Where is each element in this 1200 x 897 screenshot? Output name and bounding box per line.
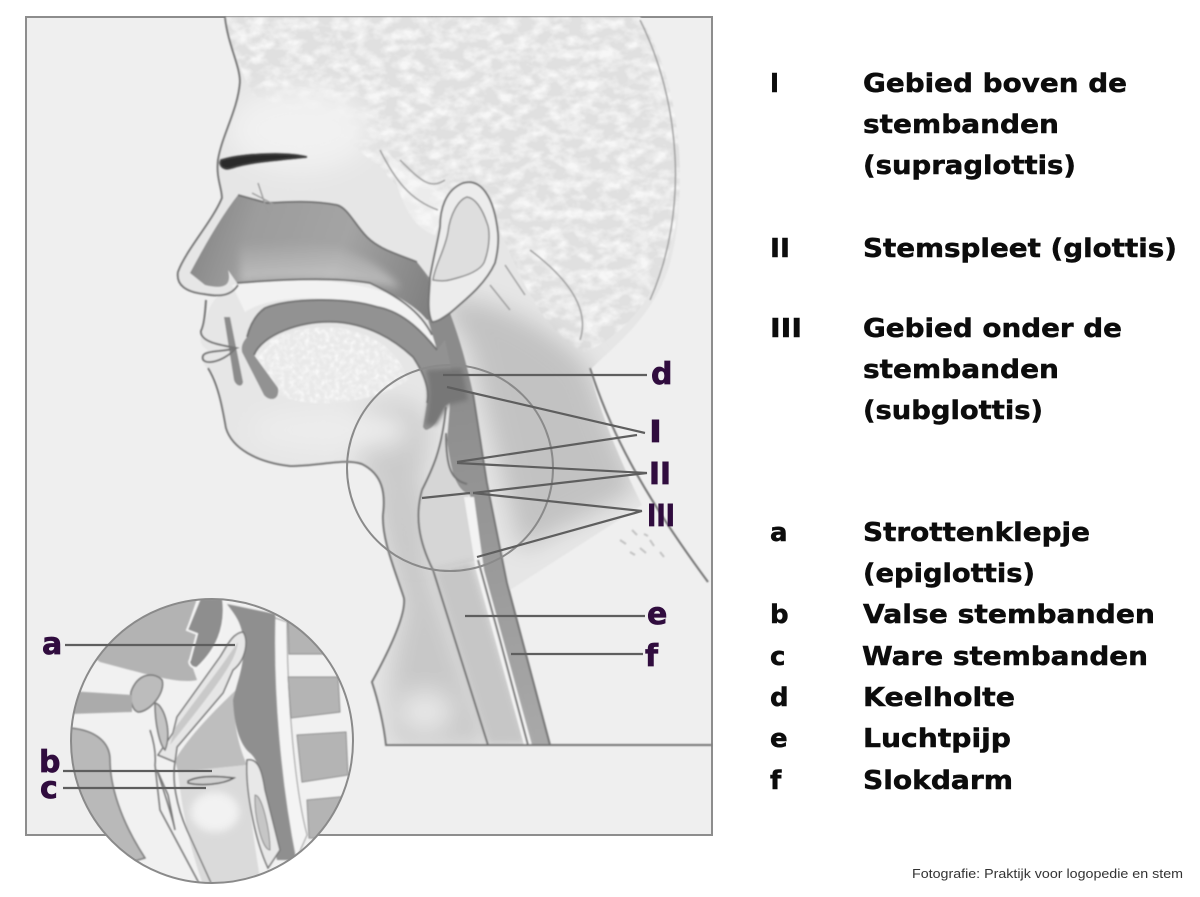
legend: [770, 69, 1177, 796]
jaw shading: [340, 408, 410, 456]
legend entry c: Ware stembanden: [862, 642, 1148, 672]
thyroid cartilage: [155, 703, 168, 750]
neck highlight: [397, 690, 453, 734]
airway highlight: [191, 792, 239, 832]
legend entry a: Strottenklepje: [863, 518, 1090, 548]
mandible speckled region: [254, 327, 408, 403]
epiglottis pocket: [187, 598, 224, 668]
inset background: [71, 599, 353, 883]
legend entry II: II: [770, 234, 790, 264]
false vocal fold: [188, 776, 234, 785]
face highlight: [243, 93, 368, 161]
legend entry b: [770, 600, 1155, 630]
leader a: [65, 644, 235, 646]
label f: f: [645, 639, 659, 674]
oral cavity and pharynx arch: [242, 300, 452, 429]
cricoid inner: [255, 795, 270, 850]
dark pharynx core: [425, 368, 468, 425]
strap muscle: [70, 691, 132, 714]
trachea: [433, 560, 528, 745]
legend entry b: b: [770, 600, 789, 630]
labels: main view: [645, 357, 675, 674]
hair: [225, 17, 680, 352]
legend entry I: stembanden: [863, 110, 1059, 140]
bottom left tissue: [72, 726, 147, 862]
airway walls: [237, 195, 550, 745]
label I: I: [649, 415, 662, 450]
leaders I: [447, 387, 645, 462]
legend entry II: Stemspleet (glottis): [863, 234, 1177, 264]
leader f: [511, 653, 643, 655]
neck shading: [383, 501, 484, 744]
anterior wall: [150, 730, 212, 885]
oral vertical bar: [224, 317, 243, 386]
hyoid: [131, 675, 163, 712]
label b: b: [39, 745, 60, 780]
illustration: head and neck cross-section: [178, 17, 712, 745]
soft palate band: [232, 280, 437, 350]
legend entry c: c: [770, 642, 785, 672]
legend entry a: [770, 518, 1090, 589]
legend entry a: (epiglottis): [863, 559, 1035, 589]
pharynx: [227, 604, 298, 860]
inset contents: [72, 600, 349, 882]
legend entry III: [770, 314, 1122, 426]
legend entry III: (subglottis): [863, 396, 1043, 426]
leader b: [63, 770, 212, 772]
legend entry III: stembanden: [863, 355, 1059, 385]
epiglottis: [158, 632, 246, 762]
label II: II: [649, 457, 671, 492]
legend entry a: a: [770, 518, 788, 548]
leader lines: main view: [422, 375, 647, 654]
leader c: [63, 787, 206, 789]
legend entry III: Gebied onder de: [863, 314, 1122, 344]
neck back: [590, 368, 708, 582]
inner ear: [433, 197, 489, 281]
back of neck shading: [440, 298, 636, 550]
inset border: [71, 599, 353, 883]
epiglottis core: [170, 642, 238, 745]
leader d: [443, 374, 647, 376]
vertebra 1: [286, 622, 323, 656]
label a: a: [42, 627, 62, 662]
ear: [429, 182, 498, 322]
eyebrow: [220, 154, 307, 169]
circle left shading: [356, 397, 434, 498]
legend entry e: e: [770, 724, 788, 754]
legend entry I: [770, 69, 1127, 181]
legend entry d: d: [770, 683, 789, 713]
photo credit: Fotografie: Praktijk voor logopedie en stem: [912, 867, 1183, 881]
labels: inset: [39, 627, 62, 806]
legend entry f: f: [770, 766, 782, 796]
legend entry I: Gebied boven de: [863, 69, 1127, 99]
background panel: [26, 17, 712, 835]
legend entry f: Slokdarm: [863, 766, 1013, 796]
esophagus and pharynx: [416, 262, 550, 745]
legend entry d: [770, 683, 1015, 713]
leaders II: [422, 463, 647, 498]
neck front: [372, 515, 712, 745]
legend entry e: Luchtpijp: [863, 724, 1011, 754]
throat speckles: [620, 530, 664, 557]
label d: d: [651, 357, 672, 392]
trachea white wall: [464, 497, 532, 745]
legend entry I: I: [770, 69, 779, 99]
vertebra 2: [288, 677, 340, 718]
label e: e: [647, 597, 667, 632]
legend entry I: (supraglottis): [863, 151, 1076, 181]
arytenoid: [247, 760, 280, 868]
legend entry d: Keelholte: [863, 683, 1015, 713]
tongue base: [97, 601, 198, 682]
label c: c: [40, 771, 58, 806]
vertebra 3: [297, 732, 348, 782]
vertebra 4: [306, 796, 341, 840]
airway lumen lower: [178, 765, 262, 890]
legend entry b: Valse stembanden: [863, 600, 1155, 630]
vertebrae: [286, 622, 349, 840]
head silhouette: [178, 17, 679, 745]
larynx soft tissue: [418, 433, 478, 570]
nasal cavity highlight: [240, 240, 400, 288]
legend entry f: [770, 766, 1013, 796]
leader e: [465, 615, 645, 617]
legend entry III: III: [770, 314, 802, 344]
spine white strip: [275, 618, 307, 860]
outlines: [178, 17, 712, 745]
nasal cavity: [190, 195, 440, 320]
magnifier circle around larynx: [347, 365, 553, 571]
back hair strokes: [252, 20, 675, 340]
legend entry e: [770, 724, 1011, 754]
mouth and chin: [201, 300, 384, 515]
leader lines: inset: [63, 645, 235, 788]
leaders III: [473, 493, 642, 557]
face profile: [178, 17, 240, 295]
inset: detail of larynx: [70, 590, 360, 890]
airway lumen upper: [175, 690, 247, 772]
label III: III: [647, 499, 675, 534]
sideburn highlight: [385, 150, 450, 235]
